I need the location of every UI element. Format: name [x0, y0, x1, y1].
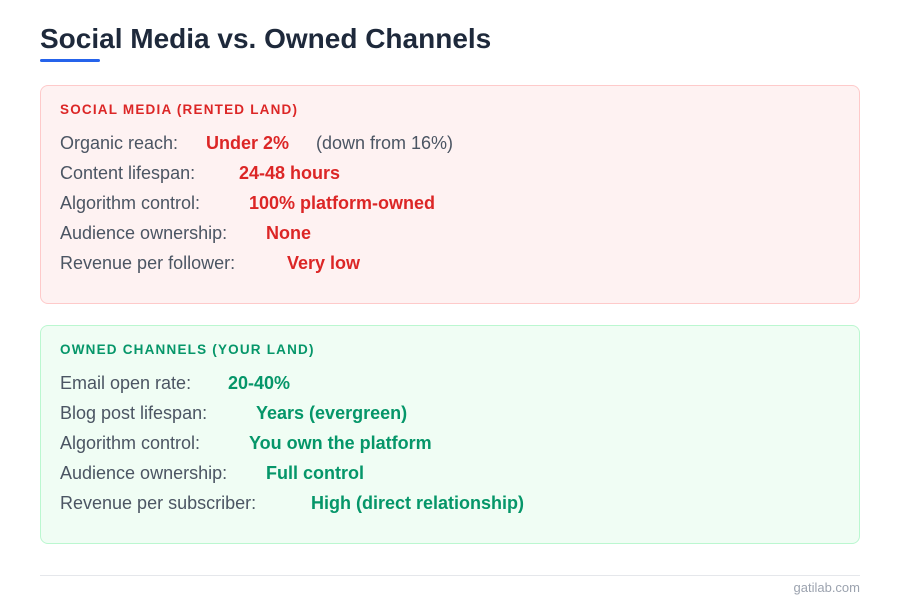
row: revenue per follower: Revenue per follower: [60, 253, 235, 273]
row: audience ownership [60, 223, 311, 243]
row: content lifespan: Content lifespan: [60, 163, 195, 183]
row: revenue per subscriber [60, 493, 524, 513]
row: revenue per subscriber: High (direct relationship) [311, 493, 524, 513]
row: content lifespan: 24-48 hours [239, 163, 340, 183]
row: audience ownership: Audience ownership: [60, 223, 227, 243]
row: revenue per follower [60, 253, 360, 273]
row: audience ownership: None [266, 223, 311, 243]
row: audience ownership: Audience ownership: [60, 463, 227, 483]
row: blog post lifespan [60, 403, 407, 423]
row: algorithm control: Algorithm control: [60, 433, 200, 453]
row: revenue per follower: Very low [287, 253, 360, 273]
row: content lifespan [60, 163, 340, 183]
row: algorithm control [60, 193, 435, 213]
row: algorithm control: 100% platform-owned [249, 193, 435, 213]
row: organic reach [60, 133, 453, 153]
panel: owned channels [40, 325, 860, 544]
row: organic reach: (down from 16%) [316, 133, 453, 153]
row: blog post lifespan: Blog post lifespan: [60, 403, 207, 423]
row: email open rate: Email open rate: [60, 373, 191, 393]
heading: owned channels: OWNED CHANNELS (YOUR LAND) [60, 342, 315, 357]
row: organic reach: Organic reach: [60, 133, 178, 153]
row: organic reach: Under 2% [206, 133, 289, 153]
row: blog post lifespan: Years (evergreen) [256, 403, 407, 423]
row: audience ownership [60, 463, 364, 483]
title underline [40, 59, 100, 62]
footer credit: gatilab.com [794, 580, 860, 595]
panel: social media [40, 85, 860, 304]
row: email open rate [60, 373, 290, 393]
row: algorithm control: Algorithm control: [60, 193, 200, 213]
row: email open rate: 20-40% [228, 373, 290, 393]
heading: social media: SOCIAL MEDIA (RENTED LAND) [60, 102, 298, 117]
title: Social Media vs. Owned Channels [40, 23, 491, 54]
row: algorithm control: You own the platform [249, 433, 432, 453]
row: algorithm control [60, 433, 432, 453]
row: audience ownership: Full control [266, 463, 364, 483]
row: revenue per subscriber: Revenue per subscriber: [60, 493, 256, 513]
